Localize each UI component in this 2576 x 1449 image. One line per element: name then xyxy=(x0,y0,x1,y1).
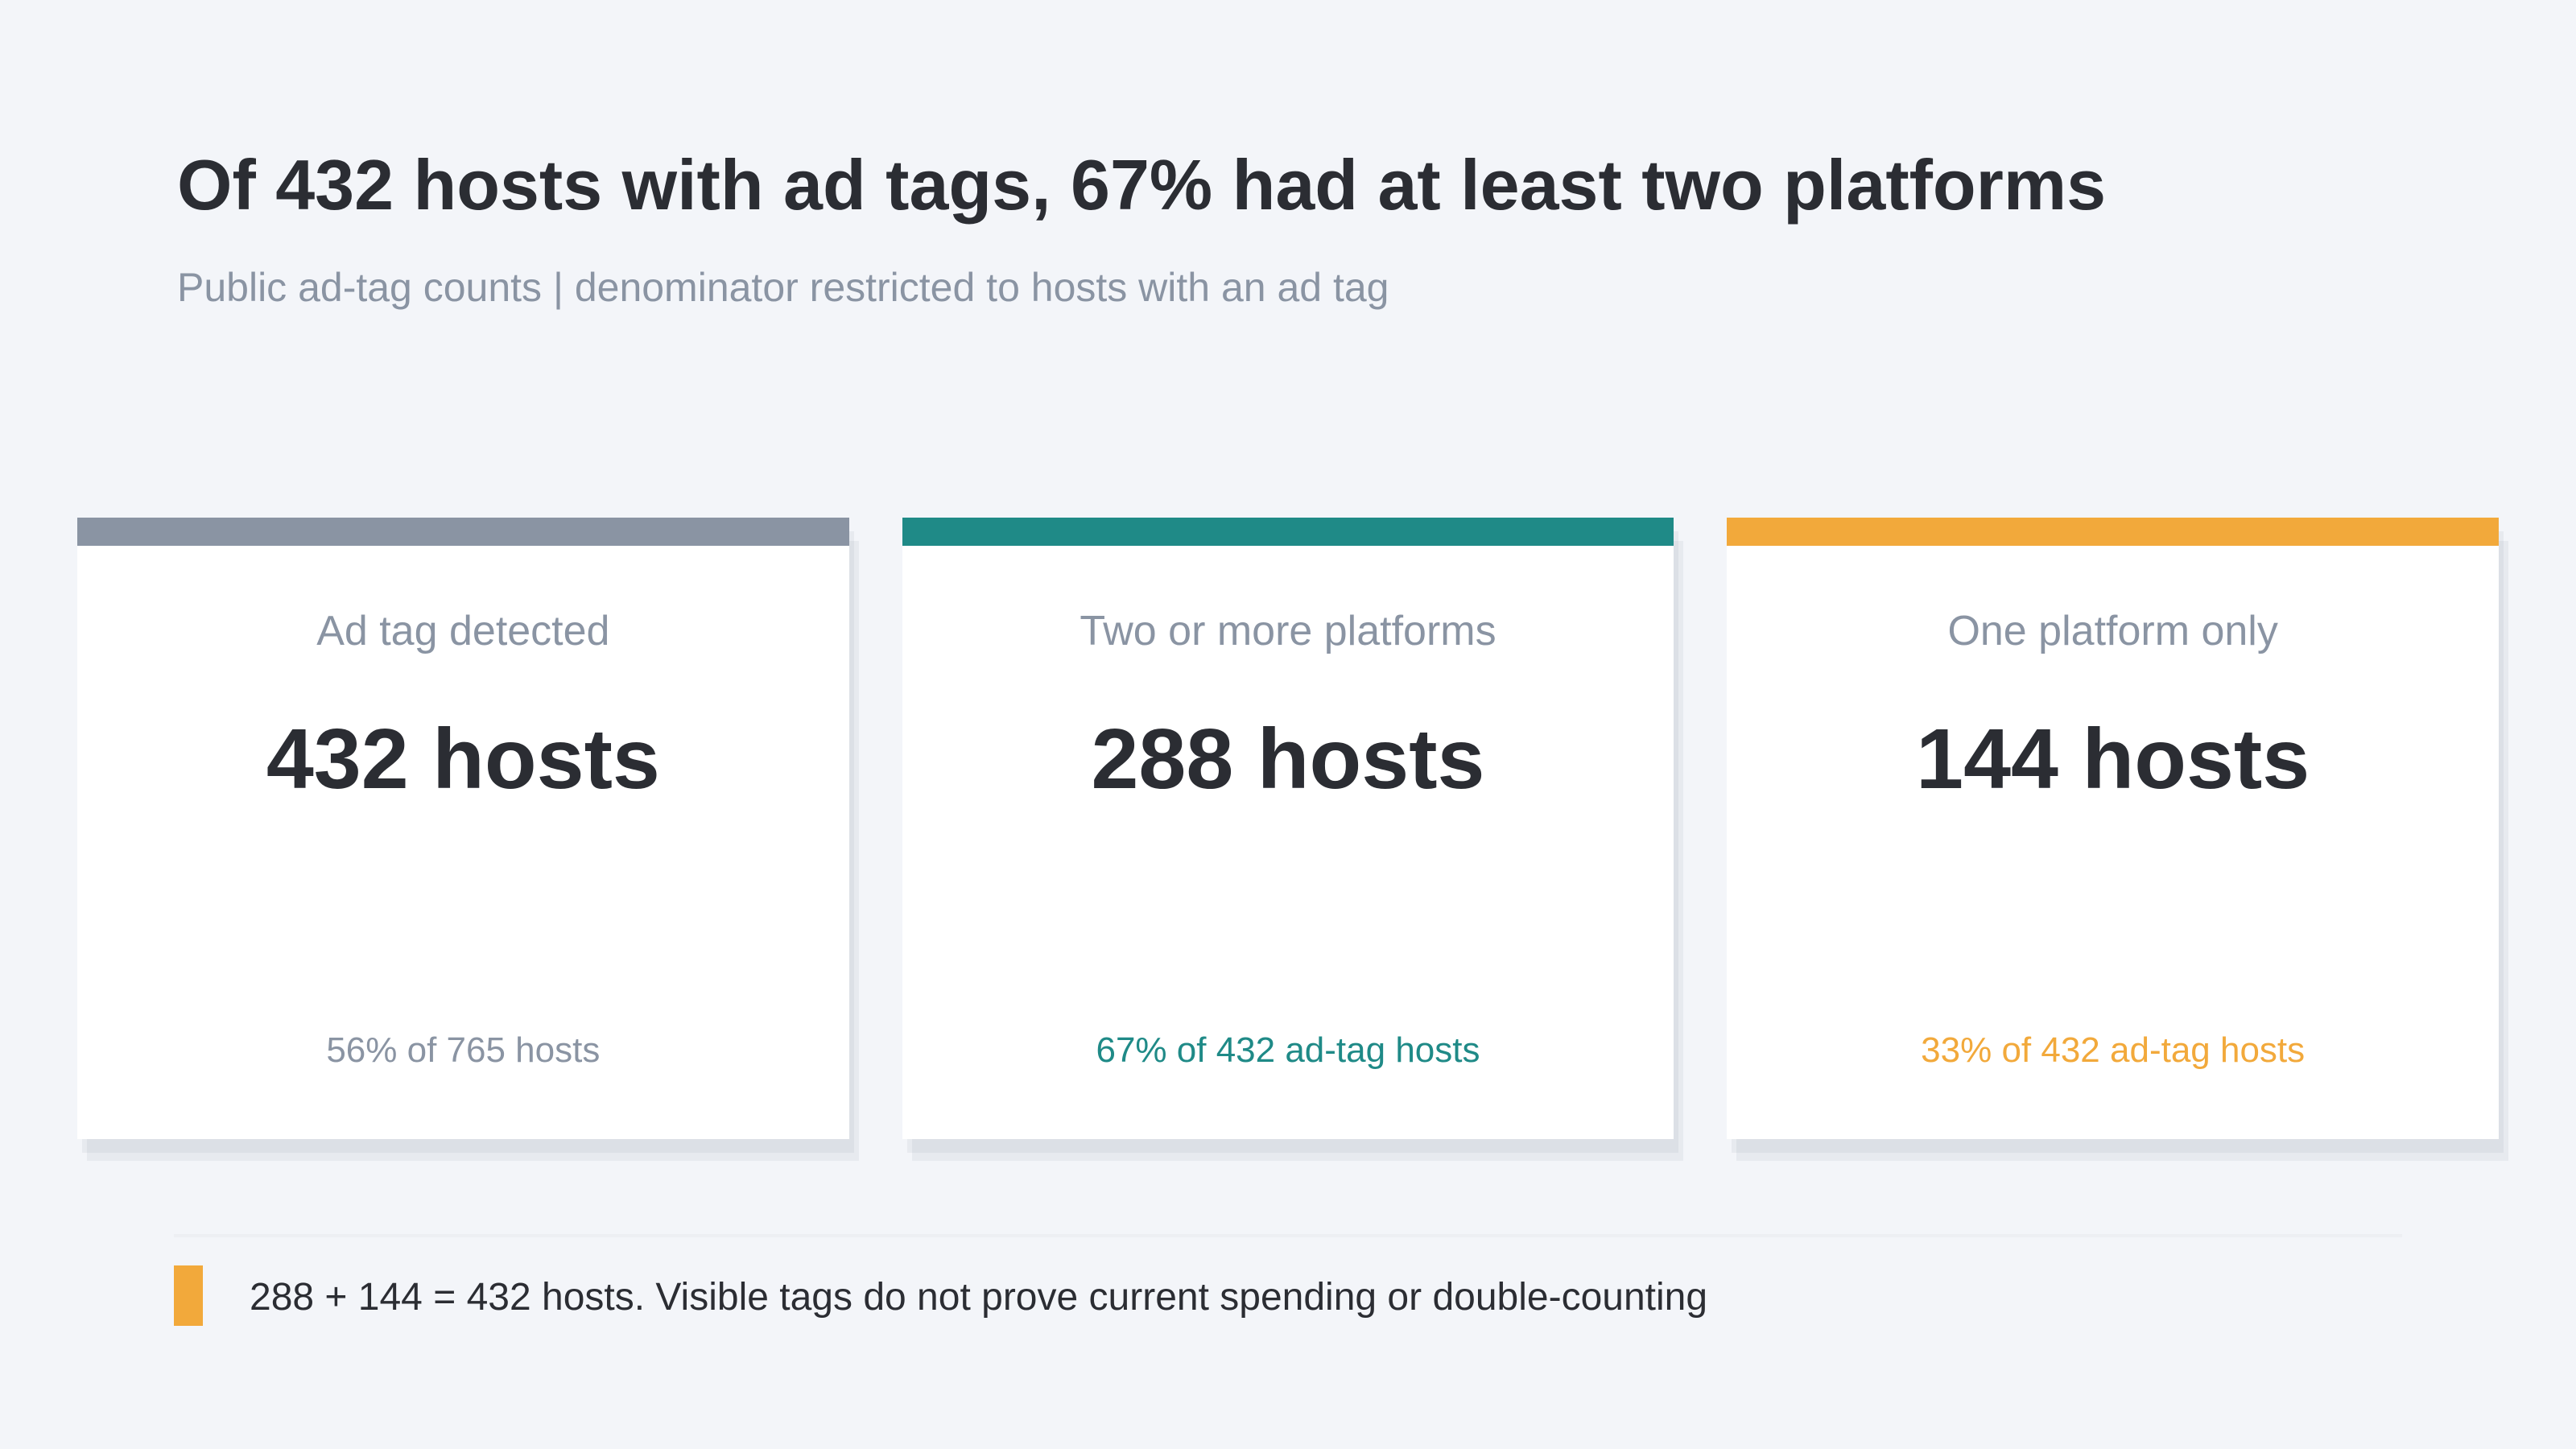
panel: two or more platforms xyxy=(902,518,1683,1161)
teal top bar xyxy=(902,518,1674,546)
card note: 67% of 432 ad-tag hosts xyxy=(1096,1030,1480,1070)
card label: Two or more platforms xyxy=(1080,608,1496,654)
card label: Ad tag detected xyxy=(316,608,609,654)
card value: 432 hosts xyxy=(266,712,660,807)
card value: 144 hosts xyxy=(1916,712,2310,807)
footnote marker xyxy=(174,1265,203,1326)
card note: 33% of 432 ad-tag hosts xyxy=(1921,1030,2305,1070)
footnote: 288 + 144 = 432 hosts. Visible tags do not prove current spending or double-counting xyxy=(250,1276,1707,1319)
card note: 56% of 765 hosts xyxy=(326,1030,600,1070)
grey top bar xyxy=(77,518,849,546)
subtitle: Public ad-tag counts | denominator restricted to hosts with an ad tag xyxy=(177,265,1389,310)
title: Of 432 hosts with ad tags, 67% had at least two platforms xyxy=(177,145,2106,225)
panel: ad tag detected xyxy=(77,518,859,1161)
card value: 288 hosts xyxy=(1091,712,1484,807)
panel: one platform only xyxy=(1727,518,2508,1161)
orange top bar xyxy=(1727,518,2499,546)
card label: One platform only xyxy=(1947,608,2278,654)
